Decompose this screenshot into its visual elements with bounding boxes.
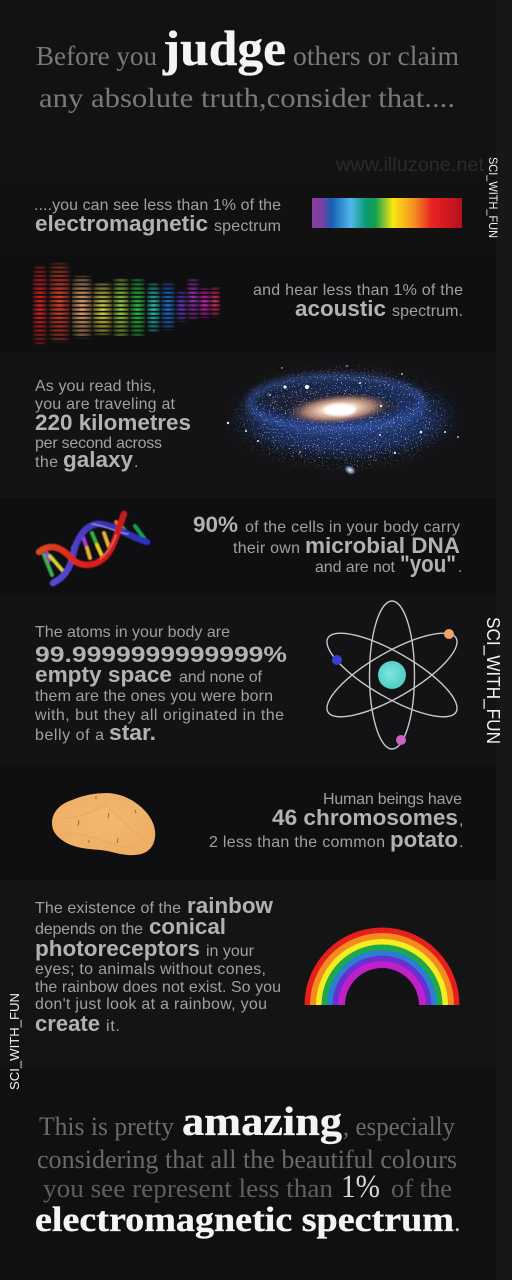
text: microbial cells: of the cells in your body carry [245,519,460,536]
text: empty space: The atoms in your body are [35,624,230,641]
text: rainbow: rainbow [187,893,274,918]
closing statement: considering that all the beautiful colours [37,1145,457,1174]
text: travel speed [35,378,191,472]
text: hearing: spectrum. [392,303,463,320]
text: microbial cells: "you" [400,551,456,578]
text: rainbow: it. [106,1018,120,1035]
text: rainbow: The existence of the [35,900,181,917]
text: chromosomes: , [459,812,463,829]
text: microbial cells: 90% [193,512,238,537]
closing statement: . [454,1208,460,1237]
text: rainbow: create [35,1011,100,1036]
title: judge [162,20,286,76]
text: chromosomes: 2 less than the common [209,834,385,851]
text: rainbow: eyes; to animals without cones, [35,961,266,978]
text: travel speed: the [35,454,58,471]
closing statement: of the [391,1174,452,1203]
closing statement: 1% [341,1169,380,1205]
panel: atoms [34,601,467,749]
text: hearing: acoustic [295,296,386,321]
text: travel speed: . [134,454,138,471]
text: empty space: star. [109,720,156,745]
watermark: lower left: SCI_WITH_FUN [7,993,22,1090]
galaxy image [225,362,463,478]
title: any absolute truth,consider that.... [39,83,455,113]
text: empty space: them are the ones you were born [35,688,273,705]
title: others or claim [293,41,459,71]
text: empty space: with, but they all originated in the [34,707,284,724]
closing statement: electromagnetic spectrum [35,1200,454,1239]
text: visible light [34,197,281,236]
text: rainbow: conical [149,914,226,939]
closing statement [35,1098,460,1239]
text: chromosomes: potato [390,827,458,852]
text: chromosomes: 46 chromosomes [272,805,458,830]
text: microbial cells [193,512,462,578]
text: empty space: belly of a [35,727,104,744]
watermark: middle right: SCI_WITH_FUN [482,617,503,744]
text: rainbow: in your [206,943,255,960]
panel: potato [52,791,463,855]
text: travel speed: As you read this, [35,378,156,395]
text: travel speed: per second across [35,435,162,452]
text: hearing [253,282,463,321]
text: travel speed: you are traveling at [35,396,176,413]
text: microbial cells: their own [233,540,300,557]
text: rainbow: photoreceptors [35,936,200,961]
website watermark: www.illuzone.net [335,155,485,176]
closing statement: amazing [182,1098,343,1144]
text: chromosomes: Human beings have [323,791,462,808]
panel: rainbow [35,893,460,1036]
text: visible light: ....you can see less than 1% of the [34,197,281,214]
panel: microbial DNA [39,512,462,583]
text: visible light: spectrum [214,218,281,235]
closing statement: you see represent less than [43,1174,333,1203]
panel: galaxy [35,362,463,478]
equalizer graphic [30,260,222,348]
text: empty space: empty space [35,662,172,687]
text: rainbow: don't just look at a rainbow, you [35,996,267,1013]
text: microbial cells: . [458,559,462,576]
closing statement: This is pretty [39,1112,174,1141]
text: empty space: 99.9999999999999% [35,642,287,667]
text: empty space: and none of [179,669,263,686]
text: travel speed: 220 kilometres [35,410,191,435]
text: chromosomes: . [459,834,463,851]
DNA helix [39,514,147,583]
closing statement: , especially [343,1112,455,1141]
spectrum bar [312,198,462,228]
text: empty space [34,624,287,745]
text: rainbow: the rainbow does not exist. So you [35,979,281,996]
panel: acoustic spectrum [30,260,463,348]
text: chromosomes [209,791,463,852]
potato illustration [52,793,155,855]
text: microbial cells: and are not [315,559,396,576]
atom diagram [317,601,467,749]
title: Before you [36,41,157,71]
watermark: top right: SCI_WITH_FUN [486,157,500,238]
text: microbial cells: microbial DNA [305,533,460,558]
text: hearing: and hear less than 1% of the [253,282,463,299]
text: travel speed: galaxy [63,447,134,472]
text: visible light: electromagnetic [35,211,208,236]
title [36,20,459,113]
panel: electromagnetic spectrum [34,197,462,236]
text: rainbow: depends on the [35,921,143,938]
text: rainbow [35,893,281,1036]
rainbow illustration [304,928,460,1005]
